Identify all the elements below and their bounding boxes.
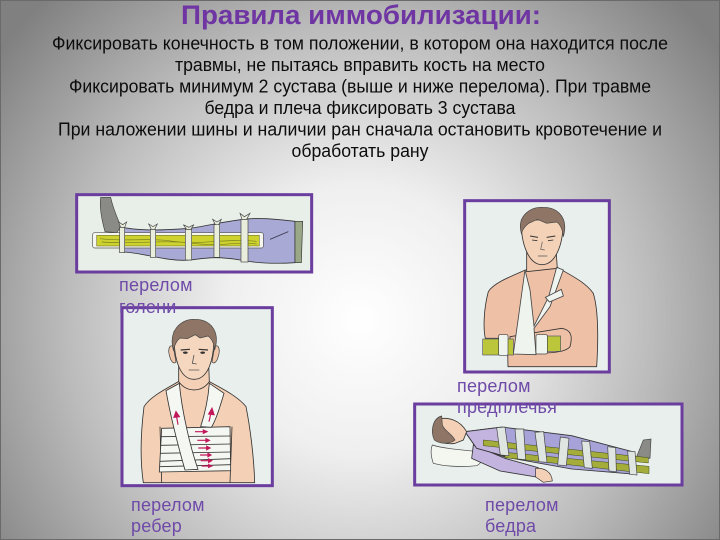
text block: immobilization rules: При наложении шины и наличии ран сначала остановить кровотечение и	[58, 120, 662, 140]
icon: red arrows	[174, 408, 214, 467]
text block: immobilization rules	[52, 34, 668, 161]
icon: torso	[141, 382, 255, 483]
icon: pillow	[431, 445, 482, 466]
label: forearm fracture: предплечья	[457, 397, 557, 417]
label: lower leg fracture: голени	[119, 297, 176, 317]
icon: forearm	[510, 328, 571, 353]
icon: bandage bands	[497, 427, 637, 475]
icon: bandage ties	[119, 213, 250, 262]
icon: head	[527, 250, 557, 272]
icon: shoulder straps	[166, 383, 198, 470]
title: Правила иммобилизации:	[181, 0, 541, 30]
label: forearm fracture: перелом	[457, 376, 531, 396]
label: femur fracture: бедра	[485, 516, 537, 536]
label: rib fracture: ребер	[131, 516, 182, 536]
icon: forearm splint	[483, 339, 513, 355]
icon: torso	[484, 267, 598, 367]
label: lower leg fracture	[119, 275, 193, 317]
icon: wooden splint	[93, 233, 263, 248]
icon: head	[179, 363, 209, 390]
label: forearm fracture	[457, 376, 557, 417]
text block: immobilization rules: травмы, не пытаясь вправить кость на место	[175, 55, 545, 75]
text block: immobilization rules: Фиксировать конечность в том положении, в котором она находится после	[52, 34, 668, 54]
panel: rib fracture	[122, 308, 272, 486]
icon: head	[433, 418, 467, 444]
panel: femur fracture	[415, 404, 682, 485]
icon: foot	[637, 439, 651, 458]
panel: lower leg fracture	[77, 195, 312, 272]
icon: body	[465, 427, 636, 474]
text block: immobilization rules: бедра и плеча фиксировать 3 сустава	[204, 98, 516, 118]
panel: forearm fracture	[465, 201, 609, 372]
text block: immobilization rules: обработать рану	[292, 141, 428, 161]
label: rib fracture: перелом	[131, 495, 205, 515]
label: rib fracture	[131, 495, 205, 536]
icon: hand	[536, 468, 552, 482]
label: femur fracture	[485, 495, 559, 536]
icon: chest bandage	[159, 383, 231, 472]
label: lower leg fracture: перелом	[119, 275, 193, 295]
icon: shoe	[100, 197, 121, 233]
text block: immobilization rules: Фиксировать минимум 2 сустава (выше и ниже перелома). При травме	[69, 76, 651, 96]
icon: arm sling	[513, 267, 563, 355]
icon: trouser leg	[120, 219, 295, 263]
icon: long splints	[483, 440, 649, 474]
label: femur fracture: перелом	[485, 495, 559, 515]
